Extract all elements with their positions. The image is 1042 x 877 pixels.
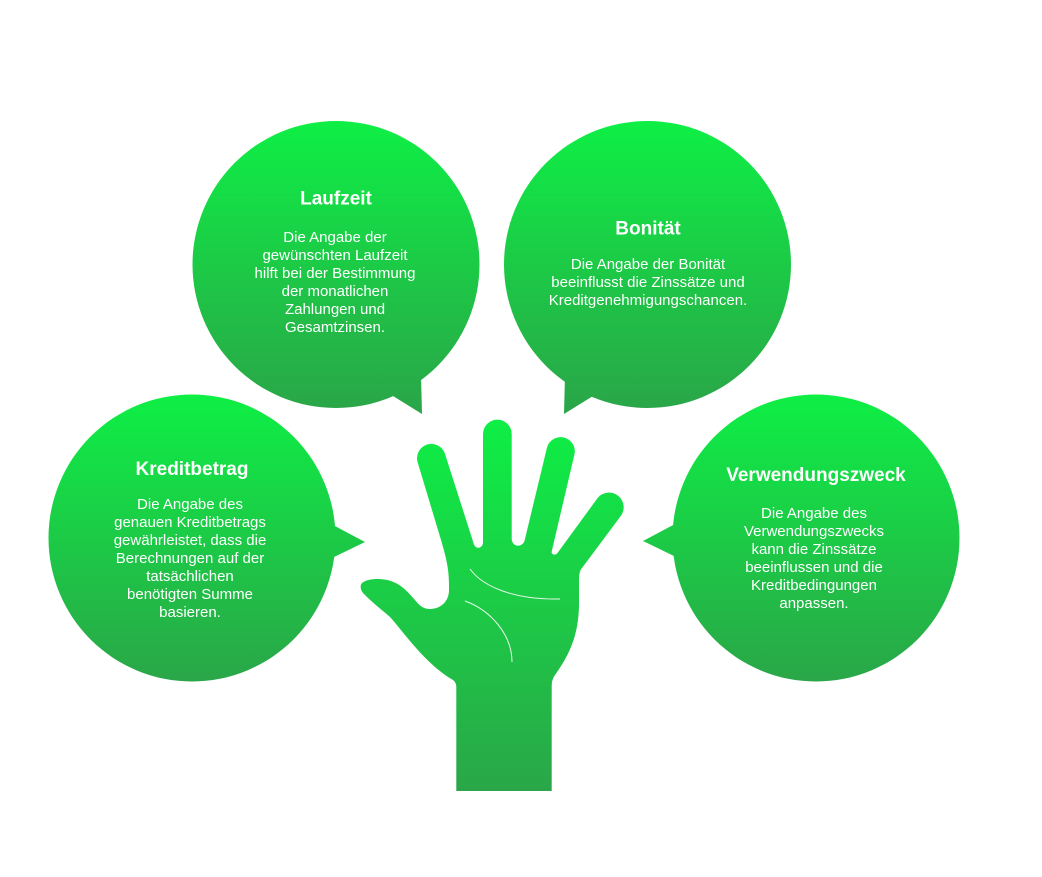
text: Kreditbetrag description: tatsächlichen	[146, 568, 234, 585]
text: Kreditbetrag description: benötigten Summe	[127, 586, 253, 603]
speech bubble: Verwendungszweck	[643, 394, 960, 682]
text: Laufzeit description: hilft bei der Bestimmung	[255, 265, 415, 282]
text: Bonität description: beeinflusst die Zinssätze und	[551, 274, 745, 291]
panel: Kreditbetrag	[48, 394, 365, 682]
text: Verwendungszweck description: Kreditbedingungen	[751, 577, 877, 594]
icon: raised hand	[361, 420, 624, 791]
text: Laufzeit description: der monatlichen	[282, 283, 388, 300]
heading: Laufzeit: Laufzeit	[300, 188, 373, 210]
text: Kreditbetrag description: basieren.	[159, 604, 221, 621]
text: Verwendungszweck description: anpassen.	[779, 595, 849, 612]
text: Kreditbetrag description: Die Angabe des	[137, 496, 243, 513]
heading: Verwendungszweck: Verwendungszweck	[726, 465, 906, 486]
text: Bonität description: Die Angabe der Bonität	[571, 256, 726, 273]
speech bubble: Laufzeit	[192, 121, 480, 414]
palm line: lower	[465, 601, 512, 662]
text: Kreditbetrag description: Berechnungen auf der	[116, 550, 264, 567]
text: Verwendungszweck description: kann die Zinssätze	[751, 541, 877, 558]
hand silhouette	[361, 420, 624, 791]
text: Verwendungszweck description: beeinflussen und die	[745, 559, 883, 576]
panel: Verwendungszweck	[643, 394, 960, 682]
heading: Kreditbetrag: Kreditbetrag	[136, 459, 248, 480]
text: Laufzeit description: gewünschten Laufzeit	[262, 247, 408, 264]
heading: Bonität: Bonität	[615, 218, 681, 240]
palm line: upper	[470, 569, 560, 599]
text: Bonität description: Kreditgenehmigungschancen.	[549, 292, 747, 309]
text: Kreditbetrag description: genauen Kreditbetrags	[114, 514, 266, 531]
text: Laufzeit description: Zahlungen und	[285, 301, 385, 318]
text: Laufzeit description: Gesamtzinsen.	[285, 319, 385, 336]
text: Laufzeit description: Die Angabe der	[283, 229, 387, 246]
panel: Laufzeit	[192, 121, 480, 414]
text: Kreditbetrag description: gewährleistet, dass die	[114, 532, 266, 549]
speech bubble: Kreditbetrag	[48, 394, 365, 682]
text: Verwendungszweck description: Verwendungszwecks	[744, 523, 884, 540]
text: Verwendungszweck description: Die Angabe des	[761, 505, 867, 522]
panel: Bonität	[504, 121, 791, 414]
speech bubble: Bonität	[504, 121, 791, 414]
